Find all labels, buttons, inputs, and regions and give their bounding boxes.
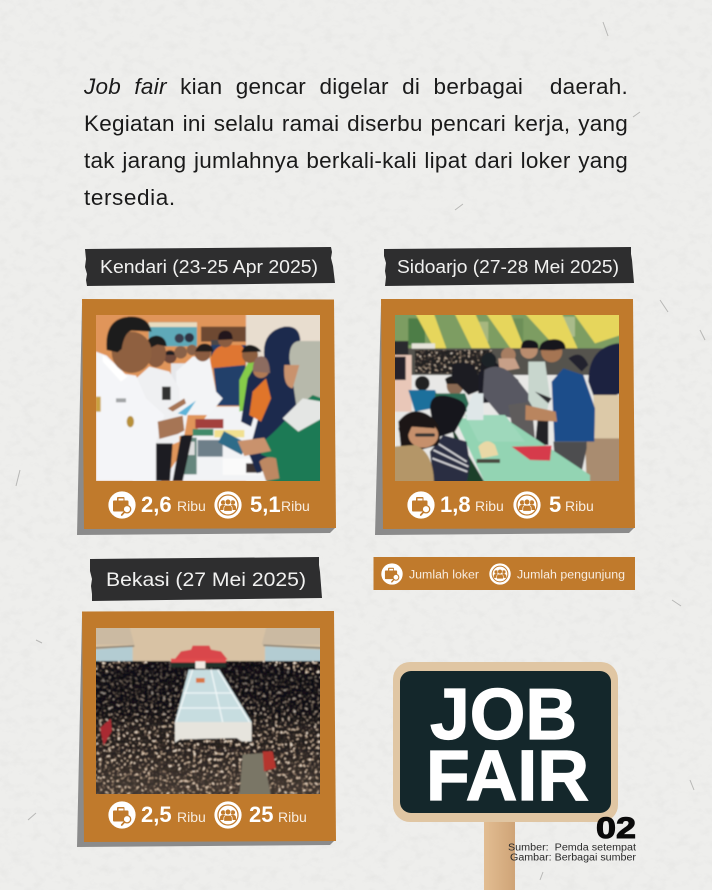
- icon: briefcase search: [108, 801, 136, 829]
- icon: people group: [489, 563, 511, 585]
- stat: visitors 25 Ribu: Ribu: [278, 809, 307, 825]
- stat: job openings 1,8 Ribu: Ribu: [475, 498, 504, 514]
- stat: job openings 2,6 Ribu: 2,6: [141, 492, 172, 517]
- women: [249, 326, 300, 473]
- stat: job openings 2,5 Ribu: Ribu: [177, 809, 206, 825]
- main official: [96, 352, 164, 481]
- job fair sign: JOB: [430, 675, 577, 755]
- stat: job openings 2,5 Ribu: 2,5: [141, 802, 172, 827]
- photo: Kendari officials at job fair booth: [96, 315, 320, 481]
- stat: visitors 5,1 Ribu: 5,1: [250, 492, 281, 517]
- card: Sidoarjo: [375, 247, 635, 535]
- photo: Bekasi hall crowd: [96, 628, 320, 794]
- page number: 02: [596, 812, 636, 845]
- intro text: Kegiatan ini selalu ramai diserbu pencari kerja, yang: [84, 110, 628, 136]
- stat: visitors 25 Ribu: 25: [249, 802, 273, 827]
- stat: visitors 5,1 Ribu: Ribu: [281, 498, 310, 514]
- intro text: tak jarang jumlahnya berkali-kali lipat dari loker yang: [84, 148, 628, 172]
- icon: briefcase search: [108, 491, 136, 519]
- seated women: [430, 396, 466, 438]
- icon: people group: [214, 801, 242, 829]
- stat: visitors 5 Ribu: Ribu: [565, 498, 594, 514]
- panel shadow: Kendari: [77, 305, 336, 535]
- legend: Jumlah pengunjung: [517, 570, 625, 582]
- table: [163, 407, 291, 481]
- job fair sign: FAIR: [426, 737, 589, 816]
- right navy man: [588, 343, 621, 402]
- legend: [374, 557, 635, 590]
- label: Kendari: Kendari (23-25 Apr 2025): [100, 256, 318, 277]
- card: Kendari: [77, 247, 336, 535]
- panel: Kendari: [82, 299, 336, 529]
- job fair sign: [393, 662, 618, 890]
- stat: visitors 25 Ribu: [214, 801, 307, 829]
- stat: visitors 5 Ribu: [513, 491, 594, 519]
- centre man: [173, 435, 193, 481]
- stat: visitors 5 Ribu: 5: [549, 492, 561, 517]
- stat: job openings 1,8 Ribu: [407, 491, 504, 519]
- source note: [508, 842, 637, 864]
- panel shadow: Sidoarjo: [375, 305, 635, 535]
- orange vest man: [211, 345, 246, 406]
- icon: briefcase search: [407, 491, 435, 519]
- stat: job openings 2,6 Ribu: Ribu: [177, 498, 206, 514]
- icon: briefcase search: [381, 563, 403, 585]
- back crowd: [415, 376, 430, 391]
- stat: job openings 1,8 Ribu: 1,8: [440, 492, 471, 517]
- label: Sidoarjo: [384, 247, 634, 286]
- legend: Jumlah loker: [409, 570, 479, 582]
- icon: people group: [214, 491, 242, 519]
- intro text: tersedia.: [84, 184, 176, 210]
- stat: visitors 5,1 Ribu: [214, 491, 310, 519]
- stat: job openings 2,6 Ribu: [108, 491, 206, 519]
- panel: Sidoarjo: [381, 299, 635, 529]
- second man: [133, 367, 179, 482]
- label: Bekasi: Bekasi (27 Mei 2025): [106, 569, 306, 591]
- label: Kendari: [85, 247, 335, 286]
- panel: Bekasi: [82, 611, 336, 842]
- source note: Sumber: Pemda setempat: [508, 842, 636, 854]
- intro text: [84, 74, 628, 210]
- stat: job openings 2,5 Ribu: [108, 801, 206, 829]
- back people: [163, 350, 177, 363]
- card: Bekasi: [77, 557, 336, 847]
- man mid back: [528, 362, 550, 417]
- panel shadow: Bekasi: [77, 617, 336, 847]
- label: Sidoarjo: Sidoarjo (27-28 Mei 2025): [397, 256, 619, 277]
- photo: Sidoarjo crowd at tables: [395, 315, 619, 481]
- source note: Gambar: Berbagai sumber: [510, 852, 637, 864]
- icon: people group: [513, 491, 541, 519]
- table: [455, 418, 590, 483]
- man bending: [483, 367, 536, 420]
- label: Bekasi: [90, 557, 322, 601]
- intro text: Job fair kian gencar digelar di berbagai daerah.: [84, 74, 628, 98]
